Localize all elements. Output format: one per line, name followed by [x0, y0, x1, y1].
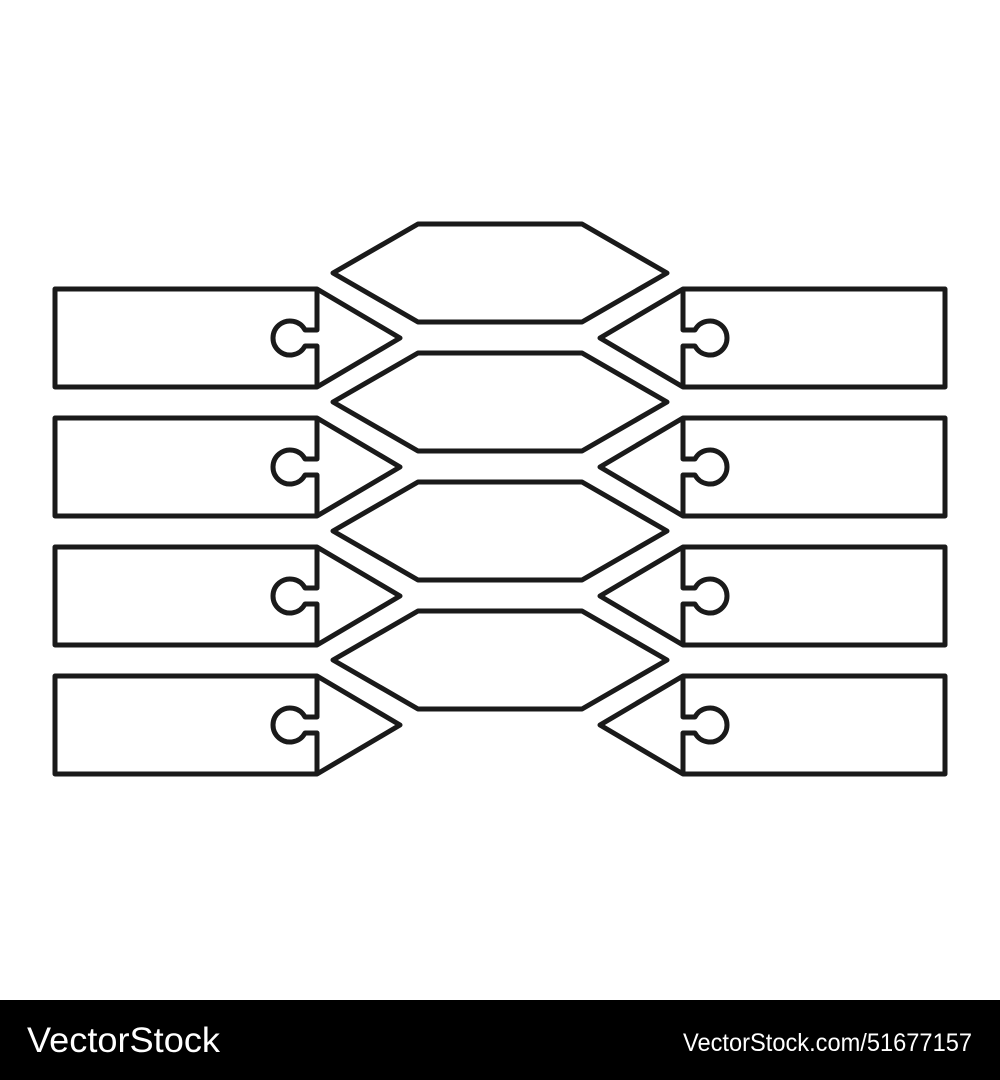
right tag 3	[600, 547, 945, 645]
right tag 4	[600, 676, 945, 774]
hexagon 2	[333, 353, 667, 451]
footer bar	[0, 1000, 1000, 1080]
left tag 2	[55, 418, 400, 516]
diagram: puzzle tags and hexagons	[55, 224, 945, 774]
right tag 2	[600, 418, 945, 516]
left tag 4	[55, 676, 400, 774]
footer url text: VectorStock.com/51677157	[683, 1029, 972, 1057]
hexagon 4	[333, 611, 667, 709]
hexagon 1	[333, 224, 667, 322]
hexagon 3	[333, 482, 667, 580]
right tag 1	[600, 289, 945, 387]
left tag 1	[55, 289, 400, 387]
footer logo text: VectorStock	[27, 1021, 221, 1060]
left tag 3	[55, 547, 400, 645]
